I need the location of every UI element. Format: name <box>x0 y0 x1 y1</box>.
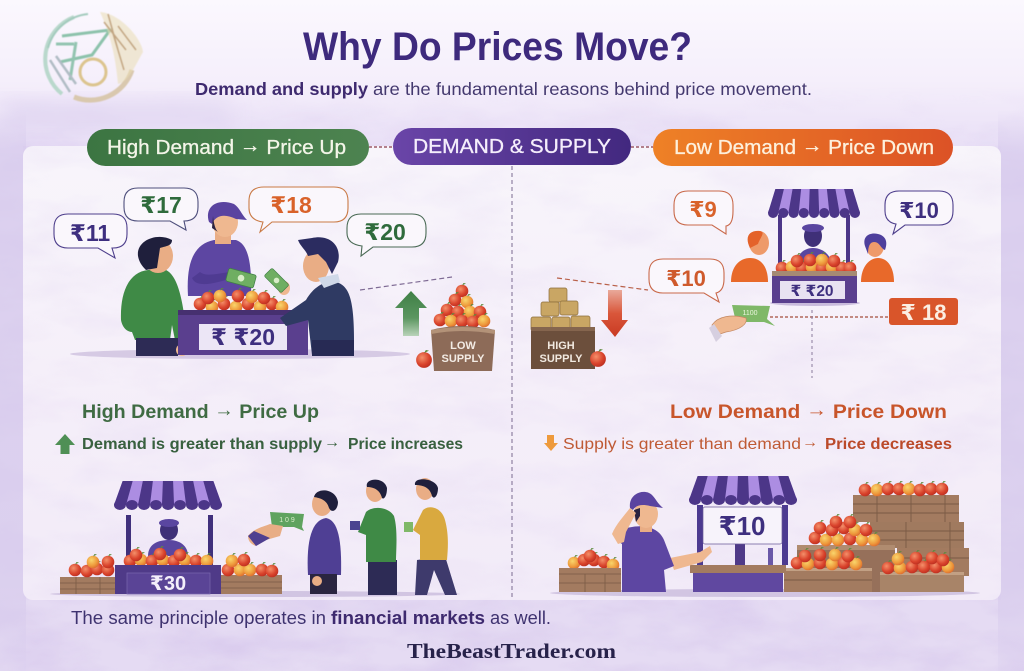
text: supply greater than demand <box>563 434 952 453</box>
pill: high demand: High Demand <box>107 137 229 159</box>
text: supply greater than demand: Price decreases <box>825 436 952 453</box>
basket: low supply: SUPPLY <box>441 353 485 365</box>
connector dashes <box>369 146 653 148</box>
subtitle <box>195 79 812 99</box>
stall: price 10 <box>689 476 797 592</box>
icon: lion logo <box>45 12 143 100</box>
person: green shopper <box>121 237 188 356</box>
title: Why Do Prices Move? <box>303 25 692 69</box>
person: vendor with cap <box>612 492 712 592</box>
text: financial markets note: financial markets <box>331 608 485 628</box>
heading: low demand: → <box>806 399 827 421</box>
scene: high demand market <box>54 187 495 371</box>
footer: website: TheBeastTrader.com <box>407 639 617 663</box>
text: demand greater than supply: Price increases <box>348 436 463 453</box>
bubble: 10 purple <box>885 191 953 234</box>
basket: low supply <box>416 283 495 371</box>
tag: 18 <box>889 298 958 325</box>
icon: hand with cash <box>709 305 775 342</box>
icon: hand with cash <box>248 512 304 546</box>
bubble: 20: ₹20 <box>364 219 406 245</box>
arrow: supply down <box>601 290 628 337</box>
stall: price 10: ₹10 <box>718 511 766 541</box>
text: demand greater than supply: Demand is greater than supply <box>82 436 322 453</box>
panel: content card <box>23 146 1001 600</box>
bubble: 9: ₹9 <box>689 197 717 222</box>
person: green queue <box>350 480 397 595</box>
crate: small apples <box>559 548 621 592</box>
crates: stacked apples <box>784 481 969 592</box>
person: seller <box>188 202 251 296</box>
heading: high demand: Price Up <box>234 402 319 423</box>
text: demand greater than supply <box>82 434 463 453</box>
scene: low demand stall with crates <box>550 476 980 597</box>
pill: low demand: → <box>802 135 822 157</box>
heading: high demand: High Demand <box>82 402 204 423</box>
text: financial markets note <box>71 608 551 628</box>
text: supply greater than demand: Supply is greater than demand <box>563 436 801 453</box>
stall: low demand with price <box>768 189 860 306</box>
bubble: 10 purple: ₹10 <box>899 198 939 223</box>
bubble: 10 orange: ₹10 <box>666 266 706 291</box>
dashed trend line up <box>360 277 452 290</box>
center divider <box>511 166 513 600</box>
text: financial markets note: as well. <box>490 608 551 628</box>
pill: low demand <box>653 129 953 166</box>
person: orange buyer <box>731 231 769 282</box>
bubble: 18: ₹18 <box>270 192 312 218</box>
bubble: 20 <box>347 214 426 256</box>
pill: low demand: Low Demand <box>674 137 792 159</box>
stall: low demand with price: ₹ ₹20 <box>790 283 834 300</box>
pill: high demand: → <box>240 135 261 157</box>
scene: low demand market <box>531 189 958 378</box>
bubble: 11 <box>54 214 127 258</box>
bubble: 10 orange <box>649 259 724 302</box>
pill: demand and supply: DEMAND & SUPPLY <box>413 136 611 158</box>
bubble: 11: ₹11 <box>70 220 110 246</box>
heading: low demand: Low Demand <box>670 401 791 423</box>
icon: hand with cash: 1 0 9 <box>279 517 295 524</box>
heading: low demand: Price Down <box>827 401 947 423</box>
crate: high supply <box>531 288 606 369</box>
pill: low demand: Price Down <box>822 137 934 159</box>
person: purple queue <box>308 490 341 594</box>
stand: apple counter with price <box>178 288 308 355</box>
dashed trend line down <box>557 278 648 290</box>
stall: price 30: ₹30 <box>150 573 186 595</box>
crate: high supply: SUPPLY <box>539 353 583 365</box>
subtitle: Demand and supply <box>195 79 368 99</box>
icon: cash <box>226 268 289 293</box>
subtitle: are the fundamental reasons behind price movement. <box>373 79 812 99</box>
text: supply greater than demand: → <box>802 434 818 451</box>
stand: apple counter with price: ₹ ₹20 <box>211 324 275 350</box>
basket: low supply: LOW <box>450 340 476 352</box>
heading: high demand: → <box>214 400 234 421</box>
icon: hand with cash: 1100 <box>742 310 758 317</box>
icon: orange arrow down <box>544 435 558 451</box>
bubble: 18 <box>249 187 348 232</box>
person: navy shopper <box>278 237 354 356</box>
pill: demand and supply <box>393 128 631 165</box>
pill: high demand: Price Up <box>261 137 346 159</box>
icon: green arrow up <box>55 434 75 454</box>
bubble: 17: ₹17 <box>140 192 182 218</box>
text: demand greater than supply: → <box>324 434 340 451</box>
pill: high demand <box>87 129 369 166</box>
person: yellow queue <box>404 478 457 595</box>
person: purple-hair buyer <box>861 234 894 282</box>
crate: high supply: HIGH <box>547 340 575 352</box>
stall: price 30 <box>60 481 282 595</box>
bubble: 9 <box>674 191 733 234</box>
arrow: supply up <box>395 291 427 336</box>
text: financial markets note: The same principle operates in <box>71 608 326 628</box>
tag: 18: ₹ 18 <box>901 300 946 325</box>
dotted line to tag <box>770 316 888 318</box>
bubble: 17 <box>124 188 198 230</box>
scene: high demand stall <box>50 478 460 597</box>
